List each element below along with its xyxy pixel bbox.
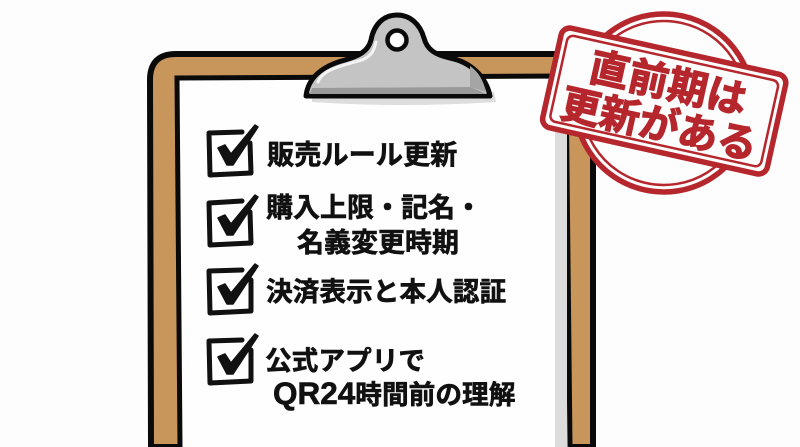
item 1: 販売ルール更新: 販売ルール更新 <box>267 139 457 170</box>
item 2: 購入上限・記名・名義変更時期: 名義変更時期 <box>297 228 459 258</box>
item 3: 決済表示と本人認証: 決済表示と本人認証 <box>266 277 506 307</box>
stamp text <box>556 41 770 169</box>
checklist <box>209 125 515 411</box>
item 1: 販売ルール更新 <box>209 125 457 175</box>
item 2: 購入上限・記名・名義変更時期 <box>209 193 482 258</box>
item 4: 公式アプリでQR24時間前の理解: QR24時間前の理解 <box>273 375 515 411</box>
item 4: 公式アプリでQR24時間前の理解 <box>209 334 515 411</box>
item 4: 公式アプリでQR24時間前の理解: 公式アプリで <box>265 346 425 376</box>
stamp <box>532 0 795 215</box>
stamp text: 更新がある <box>556 82 761 169</box>
item 3: 決済表示と本人認証 <box>209 264 506 313</box>
clipboard board <box>150 54 593 447</box>
stamp text: 直前期は <box>585 46 751 123</box>
clip <box>306 15 496 105</box>
item 2: 購入上限・記名・名義変更時期: 購入上限・記名・ <box>266 193 482 223</box>
